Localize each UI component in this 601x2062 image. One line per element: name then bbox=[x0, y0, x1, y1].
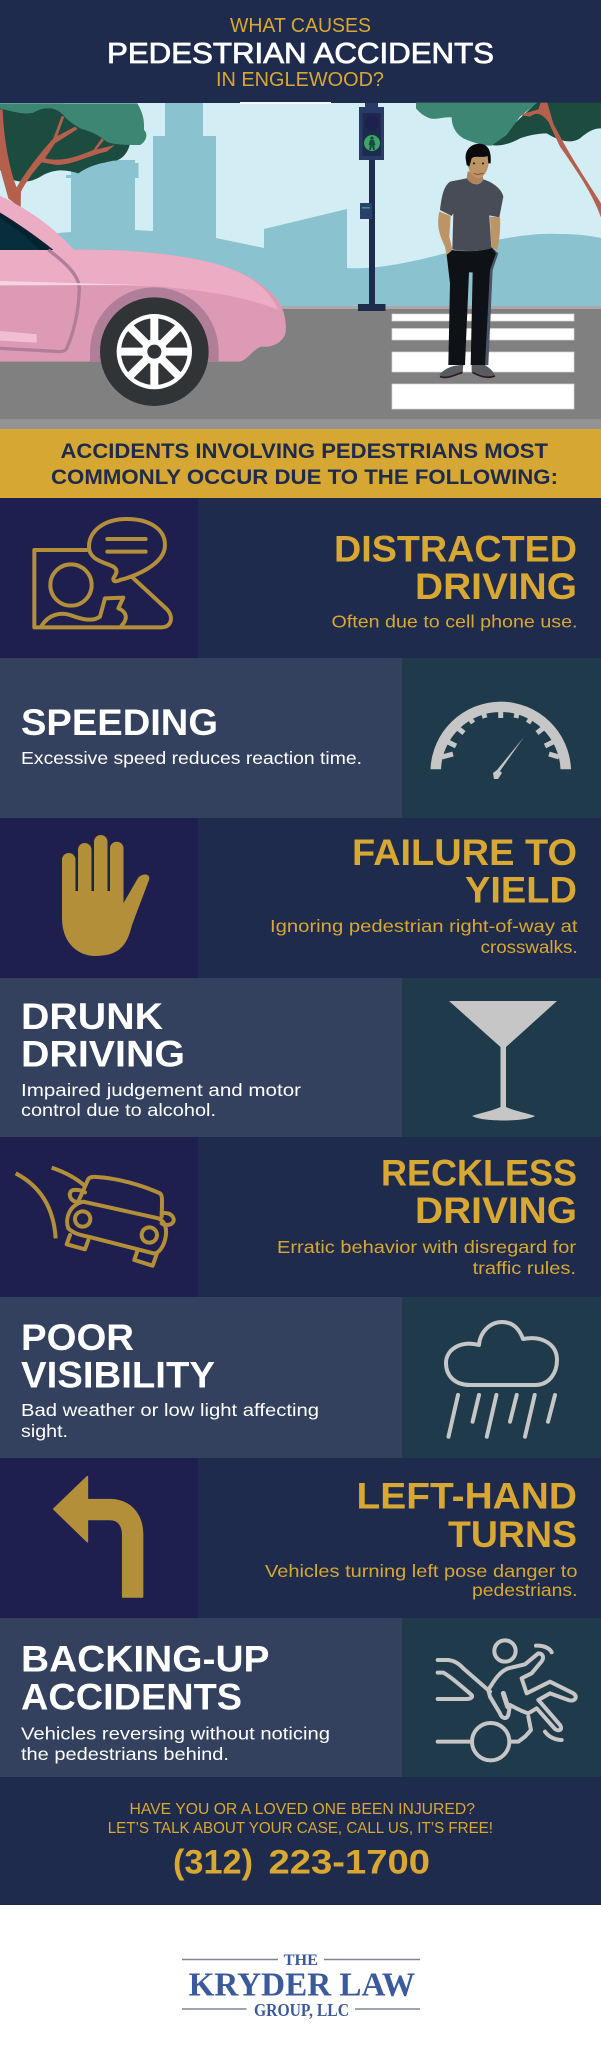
city skyline bbox=[0, 103, 601, 330]
heading and description: Erratic behavior with disregard for bbox=[277, 1237, 576, 1257]
logo: The Kryder Law Group bbox=[182, 1952, 420, 2020]
icon: speedometer bbox=[430, 702, 571, 779]
heading and description bbox=[21, 1316, 319, 1441]
heading and description: DISTRACTED bbox=[334, 528, 577, 570]
heading and description bbox=[332, 528, 578, 632]
heading and description bbox=[21, 995, 301, 1120]
heading and description: FAILURE TO bbox=[352, 831, 577, 873]
heading and description: pedestrians. bbox=[472, 1580, 578, 1600]
logo: The Kryder Law Group: THE bbox=[284, 1952, 318, 1969]
heading and description: ACCIDENTS bbox=[21, 1676, 242, 1718]
phone number: 223-1700 bbox=[268, 1844, 430, 1882]
icon: rain cloud bbox=[446, 1322, 557, 1437]
heading and description: DRIVING bbox=[21, 1033, 185, 1075]
icon: person with phone and speech bubble bbox=[34, 519, 171, 627]
panel: poor visibility bbox=[0, 1297, 601, 1458]
icon: raised hand bbox=[62, 835, 149, 956]
icon: swerving car bbox=[16, 1168, 174, 1266]
heading and description: Bad weather or low light affecting bbox=[21, 1400, 319, 1420]
icon: left turn arrow bbox=[54, 1476, 143, 1597]
panel: speeding bbox=[0, 658, 601, 818]
heading and description: Ignoring pedestrian right-of-way at bbox=[270, 916, 578, 936]
subheading band: ACCIDENTS INVOLVING PEDESTRIANS MOST bbox=[60, 440, 548, 463]
heading and description: DRIVING bbox=[415, 1189, 577, 1231]
crosswalk bbox=[392, 314, 574, 409]
icon: martini glass bbox=[449, 1001, 557, 1120]
subheading band bbox=[0, 429, 601, 498]
heading and description bbox=[21, 1638, 330, 1764]
panel: reckless driving bbox=[0, 1137, 601, 1297]
heading and description bbox=[270, 831, 578, 957]
pink car bbox=[0, 196, 286, 406]
heading and description: POOR bbox=[21, 1316, 134, 1358]
logo: The Kryder Law Group: KRYDER LAW bbox=[189, 1967, 415, 2004]
header banner bbox=[0, 0, 601, 103]
road bbox=[0, 306, 601, 429]
call to action footer: HAVE YOU OR A LOVED ONE BEEN INJURED? bbox=[130, 1801, 475, 1818]
phone number: (312) bbox=[173, 1844, 253, 1882]
heading and description: SPEEDING bbox=[21, 701, 218, 743]
title: IN ENGLEWOOD? bbox=[216, 69, 384, 91]
subheading band: COMMONLY OCCUR DUE TO THE FOLLOWING: bbox=[51, 466, 558, 489]
heading and description bbox=[277, 1152, 577, 1278]
title: WHAT CAUSES bbox=[230, 15, 371, 37]
heading and description: VISIBILITY bbox=[21, 1354, 215, 1396]
panel: failure to yield bbox=[0, 818, 601, 978]
icon: pedestrian hit by car bbox=[438, 1640, 576, 1760]
call to action footer: LET’S TALK ABOUT YOUR CASE, CALL US, IT’S FREE! bbox=[108, 1820, 493, 1837]
heading and description: Vehicles reversing without noticing bbox=[21, 1724, 330, 1744]
title: PEDESTRIAN ACCIDENTS bbox=[107, 38, 494, 70]
logo: The Kryder Law Group: GROUP, LLC bbox=[254, 2000, 349, 2020]
left tree bbox=[0, 103, 146, 208]
heading and description: traffic rules. bbox=[473, 1258, 576, 1278]
heading and description: LEFT-HAND bbox=[356, 1474, 577, 1516]
heading and description bbox=[21, 701, 362, 768]
heading and description: BACKING-UP bbox=[21, 1638, 270, 1680]
heading and description bbox=[265, 1474, 578, 1600]
heading and description: DRIVING bbox=[415, 565, 577, 607]
person standing bbox=[438, 144, 503, 378]
heading and description: TURNS bbox=[448, 1513, 577, 1555]
heading and description: DRUNK bbox=[21, 995, 163, 1037]
heading and description: sight. bbox=[21, 1421, 68, 1441]
heading and description: Often due to cell phone use. bbox=[332, 612, 578, 632]
heading and description: control due to alcohol. bbox=[21, 1100, 216, 1120]
call to action footer bbox=[0, 1777, 601, 1905]
heading and description: RECKLESS bbox=[381, 1152, 577, 1194]
panel: drunk driving bbox=[0, 978, 601, 1137]
heading and description: crosswalks. bbox=[481, 937, 578, 957]
panel: left-hand turns bbox=[0, 1458, 601, 1618]
car wheel bbox=[100, 297, 209, 406]
title bbox=[107, 15, 494, 91]
panel: backing-up accidents bbox=[0, 1618, 601, 1777]
right tree bbox=[416, 103, 601, 217]
phone number bbox=[173, 1844, 430, 1882]
heading and description: Vehicles turning left pose danger to bbox=[265, 1561, 578, 1581]
heading and description: Impaired judgement and motor bbox=[21, 1080, 301, 1100]
heading and description: the pedestrians behind. bbox=[21, 1744, 229, 1764]
panel: distracted driving bbox=[0, 498, 601, 658]
pedestrian signal bbox=[358, 103, 386, 311]
heading and description: YIELD bbox=[465, 869, 577, 911]
street scene illustration bbox=[0, 102, 601, 429]
heading and description: Excessive speed reduces reaction time. bbox=[21, 748, 362, 768]
